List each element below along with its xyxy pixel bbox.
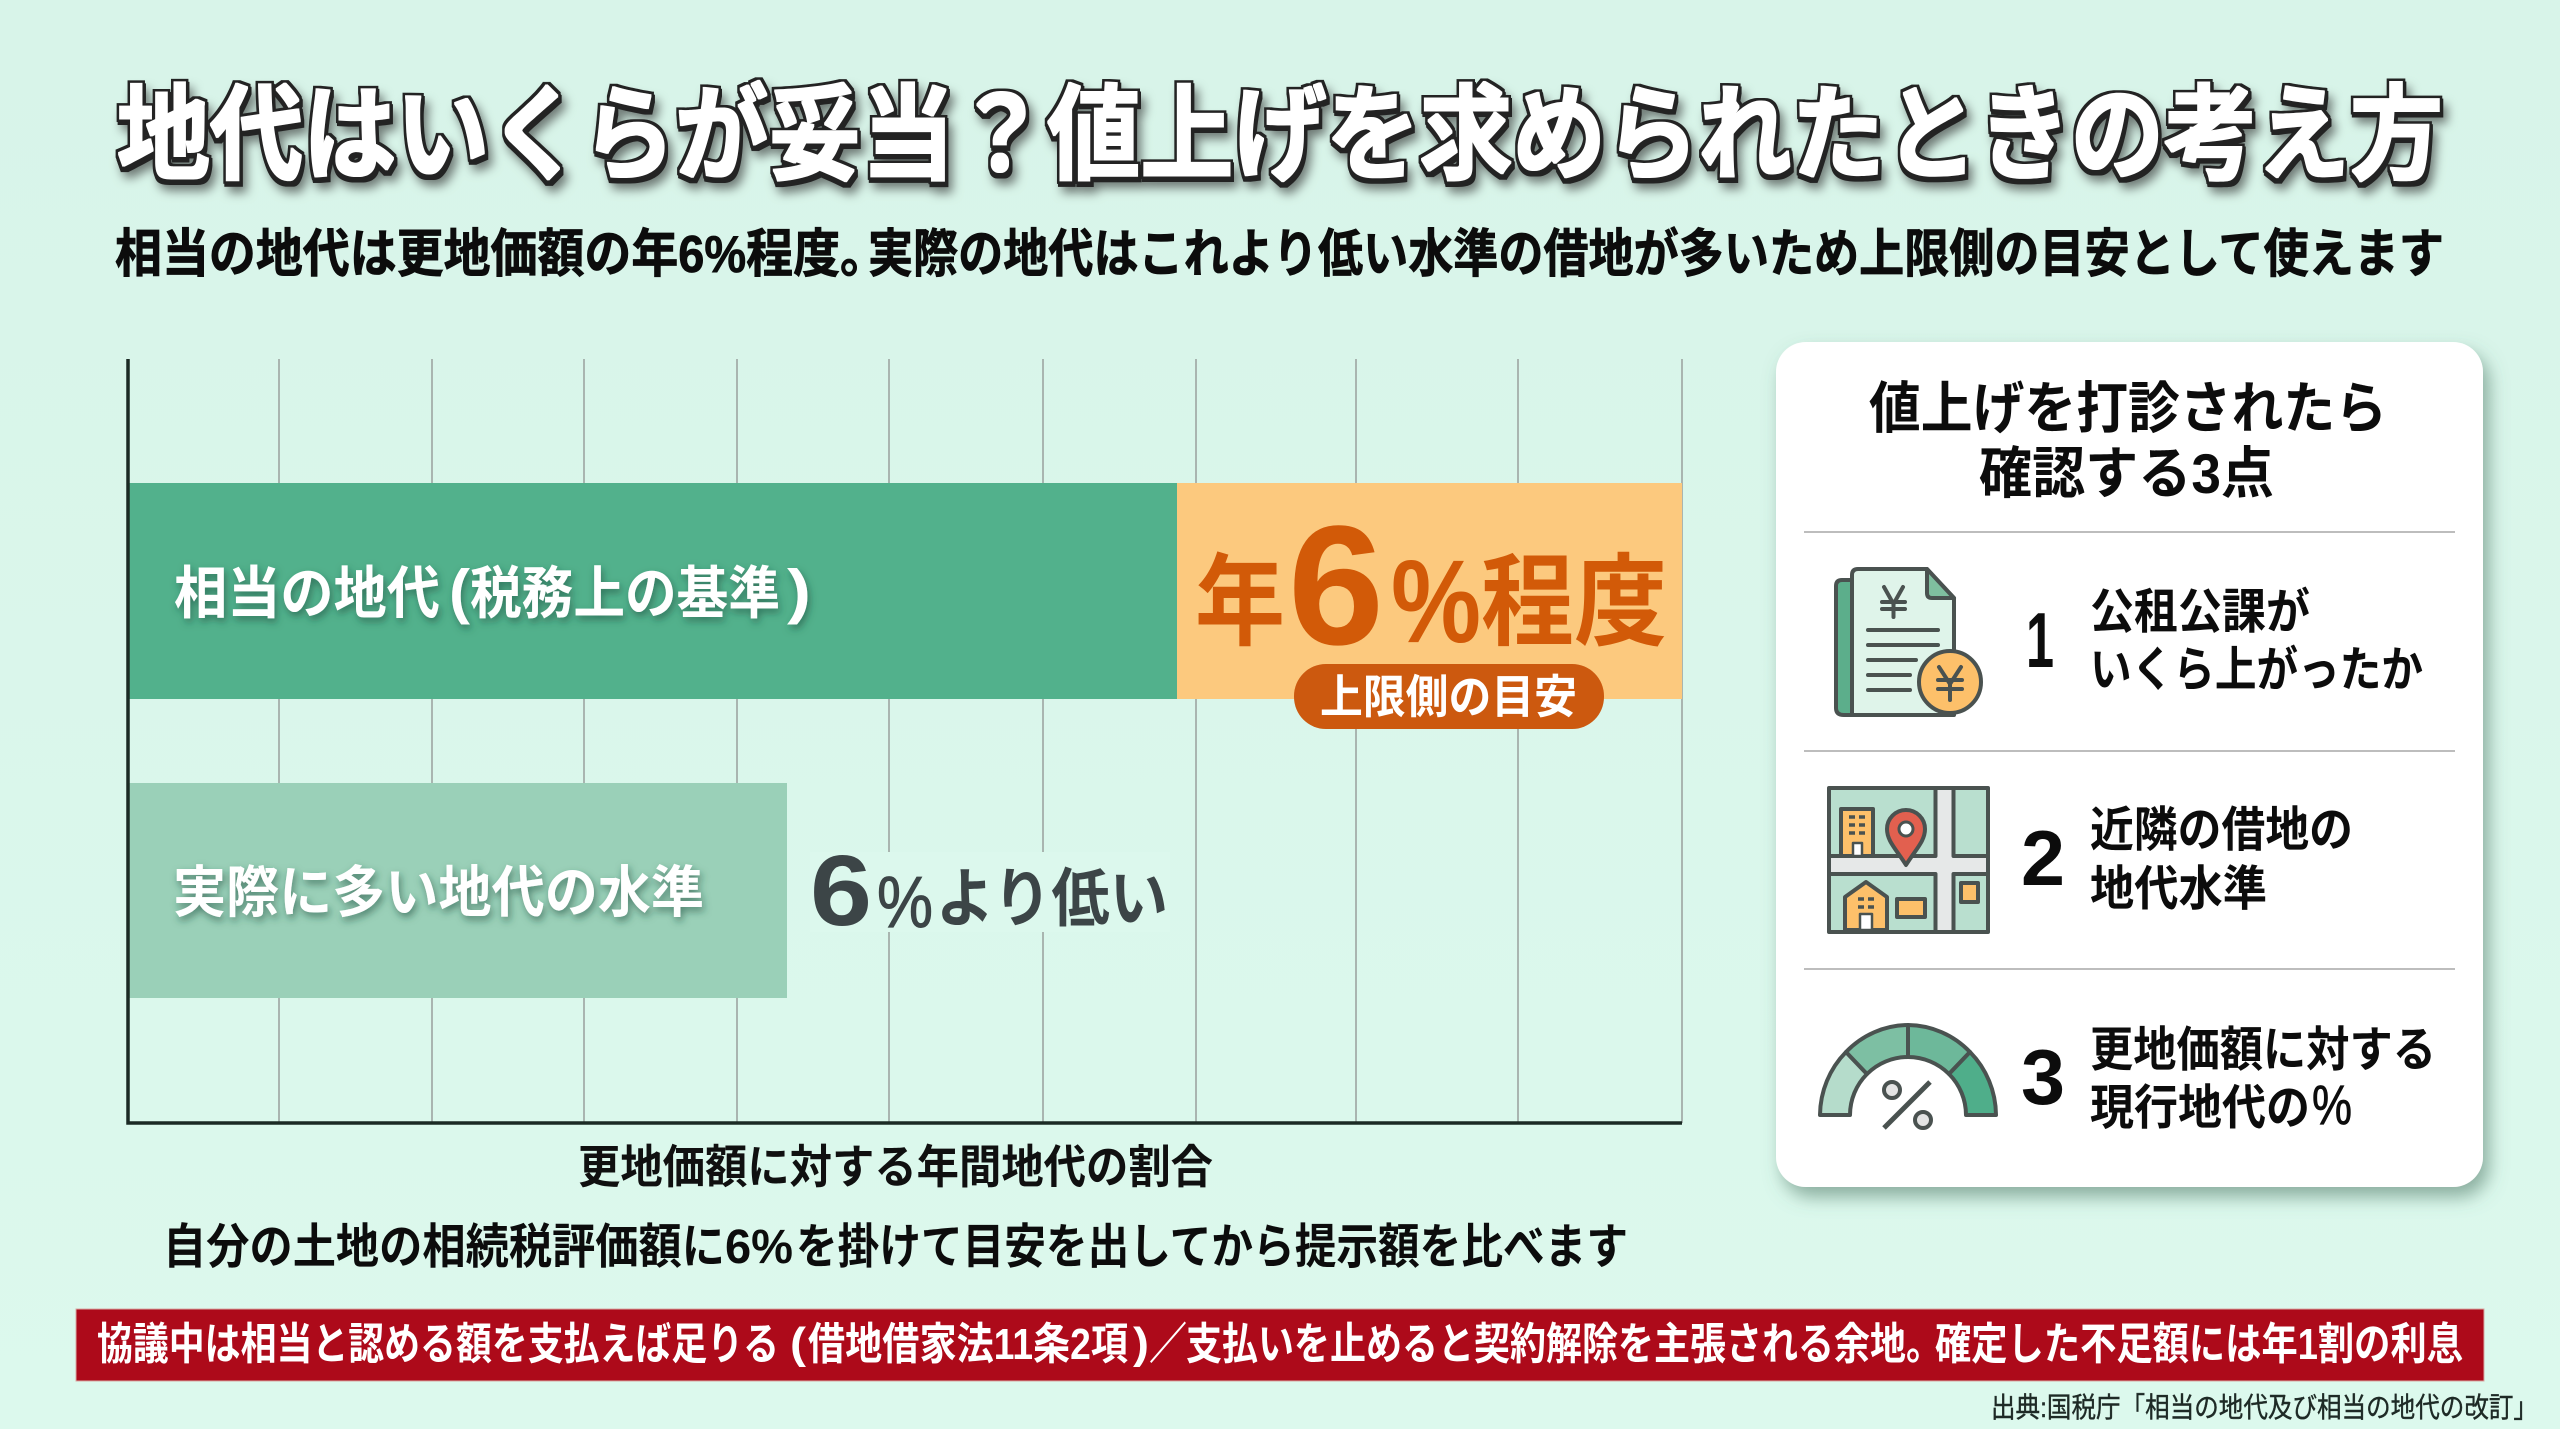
- item 2 text: 地代水準: [2090, 863, 2267, 916]
- bar: standard rent: 相当の地代: [174, 562, 440, 626]
- value label: below 6%: %: [877, 863, 933, 943]
- item 3 text: %: [2312, 1073, 2352, 1136]
- guidance note: [163, 1221, 1628, 1274]
- warning band: 協議中は相当と認める額を支払えば足りる: [97, 1320, 779, 1369]
- warning band: [76, 1309, 2484, 1381]
- item 2 text: [2090, 804, 2353, 916]
- bar chart: [128, 359, 1682, 1123]
- item 1 text: いくら上がったか: [2090, 644, 2423, 697]
- warning band: 支払いを止めると契約解除を主張される余地。: [1186, 1320, 1942, 1369]
- badge: upper guide: 上限側の目安: [1320, 671, 1577, 723]
- item 3 text: 更地価額に対する: [2090, 1024, 2436, 1077]
- guidance note: 自分の土地の相続税評価額に: [163, 1221, 725, 1274]
- warning band: ／: [1149, 1320, 1187, 1369]
- guidance note: を掛けて目安を出してから提示額を比べます: [796, 1221, 1628, 1274]
- warning band: 確定した不足額には年1割の利息: [1935, 1320, 2463, 1369]
- bar: standard rent: [128, 483, 1177, 699]
- bar: typical actual rent: [128, 783, 787, 998]
- chart axes: [128, 359, 1682, 1123]
- warning band: (: [790, 1319, 806, 1368]
- value label: below 6%: [810, 835, 1170, 947]
- panel background: [1776, 342, 2483, 1187]
- chart gridlines: [279, 359, 1682, 1123]
- panel heading: [1869, 377, 2387, 505]
- warning band: ): [1133, 1319, 1149, 1368]
- value label: below 6%: 6: [810, 835, 872, 947]
- bar segment: upper guide: 6: [1288, 491, 1384, 681]
- panel: three points to check: [1776, 342, 2483, 1187]
- number 1: 1: [2026, 596, 2054, 684]
- item 3: [1820, 1024, 2436, 1136]
- number 2: 2: [2021, 814, 2065, 902]
- guidance note: 6%: [725, 1221, 793, 1274]
- axis title: 更地価額に対する年間地代の割合: [578, 1141, 1213, 1193]
- icon: neighbourhood map with pin: [1829, 788, 1988, 932]
- bar: standard rent: (: [449, 558, 470, 625]
- bar segment: upper guide: %: [1391, 536, 1481, 668]
- item 2 text: 近隣の借地の: [2090, 804, 2353, 857]
- value label: below 6%: より低い: [936, 863, 1168, 935]
- bar segment: upper guide: 年: [1195, 547, 1285, 659]
- icon: tax document with yen coin: [1836, 569, 1981, 715]
- panel heading: 値上げを打診されたら: [1869, 377, 2387, 440]
- item 2: [1829, 788, 2353, 932]
- icon: percentage gauge: [1820, 1025, 1996, 1128]
- subtitle: 相当の地代は更地価額の年6%程度。: [115, 226, 887, 284]
- item 3 text: [2090, 1024, 2436, 1136]
- item 1: [1836, 569, 2423, 715]
- subtitle: [115, 226, 2444, 284]
- warning band: 借地借家法11条2項: [808, 1320, 1128, 1369]
- item 1 text: 公租公課が: [2090, 586, 2310, 639]
- panel heading: 確認する3点: [1979, 442, 2274, 505]
- number 3: 3: [2021, 1033, 2065, 1121]
- item 3 text: 現行地代の: [2090, 1082, 2310, 1135]
- bar: standard rent: 税務上の基準: [470, 562, 780, 626]
- bar segment: upper guide: 程度: [1481, 547, 1667, 659]
- bar segment: upper guide: [1177, 483, 1682, 699]
- bar: typical actual rent: 実際に多い地代の水準: [173, 861, 704, 924]
- item 1 text: [2090, 586, 2423, 697]
- bar: standard rent: ): [787, 558, 811, 625]
